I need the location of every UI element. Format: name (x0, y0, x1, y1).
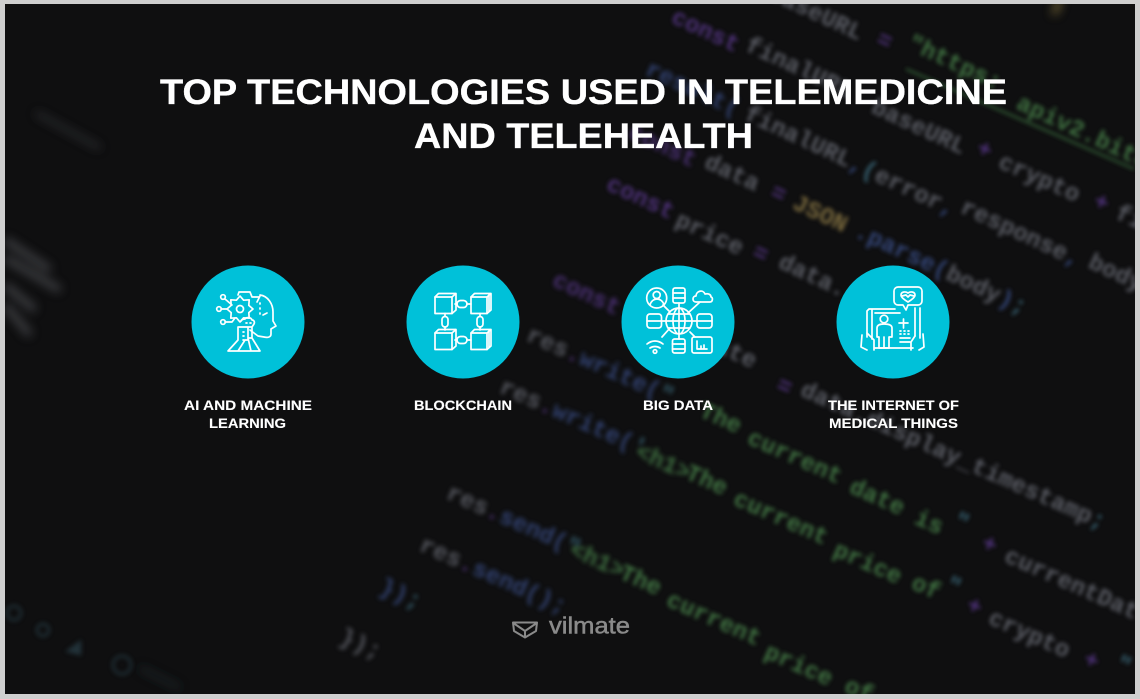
title: TOP TECHNOLOGIES USED IN TELEMEDICINE (160, 73, 1007, 112)
label: LEARNING (209, 416, 286, 431)
background: blurred code photo: res.write(" (522, 323, 677, 412)
background: blurred code photo: currentDat (1000, 544, 1140, 627)
label: BIG DATA (643, 398, 713, 413)
background: blurred code photo: + (972, 136, 996, 166)
background: blurred code photo: price (760, 640, 837, 694)
background: blurred code photo: data. (774, 250, 850, 305)
background: blurred code photo: <h1> (631, 440, 694, 488)
background: blurred code photo: The (695, 399, 745, 441)
label: AI AND MACHINE (184, 398, 312, 413)
background: blurred code photo: The (615, 561, 665, 603)
label (184, 398, 312, 431)
background: blurred code photo: (error, (857, 157, 959, 224)
background: blurred code photo: price (671, 208, 747, 263)
background: blurred code photo: = (748, 240, 772, 270)
icon: AI head with gear (192, 266, 304, 378)
background: blurred code photo: "https: (903, 31, 1005, 98)
background: blurred code photo: date (845, 475, 908, 523)
background: blurred code photo: res.write(' (495, 375, 650, 464)
background: blurred code photo: const (624, 120, 700, 175)
background: blurred code photo: const (548, 268, 624, 323)
background: blurred code photo: const (602, 172, 678, 227)
background: blurred code photo: res.send(); (415, 533, 570, 622)
background: blurred code photo: crypto (994, 150, 1084, 209)
title: AND TELEHEALTH (414, 117, 753, 156)
background: blurred code photo: const (667, 5, 743, 60)
background: blurred code photo: finalURL, (740, 102, 869, 181)
label (828, 398, 959, 431)
column: internet of medical things (828, 266, 959, 431)
background: blurred code photo: The (681, 461, 731, 503)
background: blurred code photo: + (1079, 647, 1103, 677)
background: blurred code photo: = (766, 180, 790, 210)
background: blurred code photo: date (697, 328, 760, 376)
background: blurred code photo: res.send(" (442, 481, 584, 564)
background: blurred code photo: current (729, 487, 832, 552)
background: blurred code photo: " (949, 509, 973, 539)
background: blurred code photo: + (977, 531, 1001, 561)
background: blurred code photo: data (700, 150, 763, 199)
background: blurred code photo: + (1089, 189, 1113, 219)
background: blurred code photo: current (743, 426, 846, 491)
background: blurred code photo: <h1> (565, 538, 628, 586)
column: big data (622, 266, 734, 413)
logo: vilmate (513, 612, 630, 638)
column: AI and machine learning (184, 266, 312, 431)
background: blurred code photo: price (829, 538, 906, 592)
background: blurred code photo: crypto (984, 606, 1074, 665)
background: blurred code photo: is (910, 506, 947, 542)
label: MEDICAL THINGS (829, 416, 958, 431)
background: blurred code photo: result( (641, 57, 743, 124)
title (160, 73, 1007, 156)
icon: logo mark (513, 622, 537, 638)
background: blurred code photo: of (907, 571, 944, 607)
background: blurred code photo: current (662, 588, 765, 653)
background: blurred code photo: = (872, 27, 896, 57)
background: blurred code photo: }); (335, 625, 385, 667)
background: blurred code photo: = (772, 373, 796, 403)
icon: chain of blocks (406, 266, 520, 378)
label: BLOCKCHAIN (414, 398, 512, 413)
label: THE INTERNET OF (828, 398, 959, 413)
background: blurred code photo: .parse(body); (850, 219, 1031, 322)
background: blurred code photo: response, (956, 195, 1085, 274)
background: blurred code photo: + (962, 593, 986, 623)
icon: data network globe (622, 266, 734, 378)
background: blurred code photo: " (941, 573, 965, 603)
background: blurred code photo: data.display_timestamp; (796, 378, 1109, 537)
background: blurred code photo: }); (375, 575, 425, 617)
column: blockchain (406, 266, 520, 413)
background: blurred code photo: baseURL (867, 95, 969, 162)
logo wordmark: vilmate (549, 612, 630, 638)
icon: tablet with health data held in hands (836, 266, 950, 378)
background: blurred code photo: " (1111, 652, 1135, 682)
background: blurred code photo: finalURL (741, 33, 856, 106)
background: blurred code photo: JSON (788, 191, 851, 240)
